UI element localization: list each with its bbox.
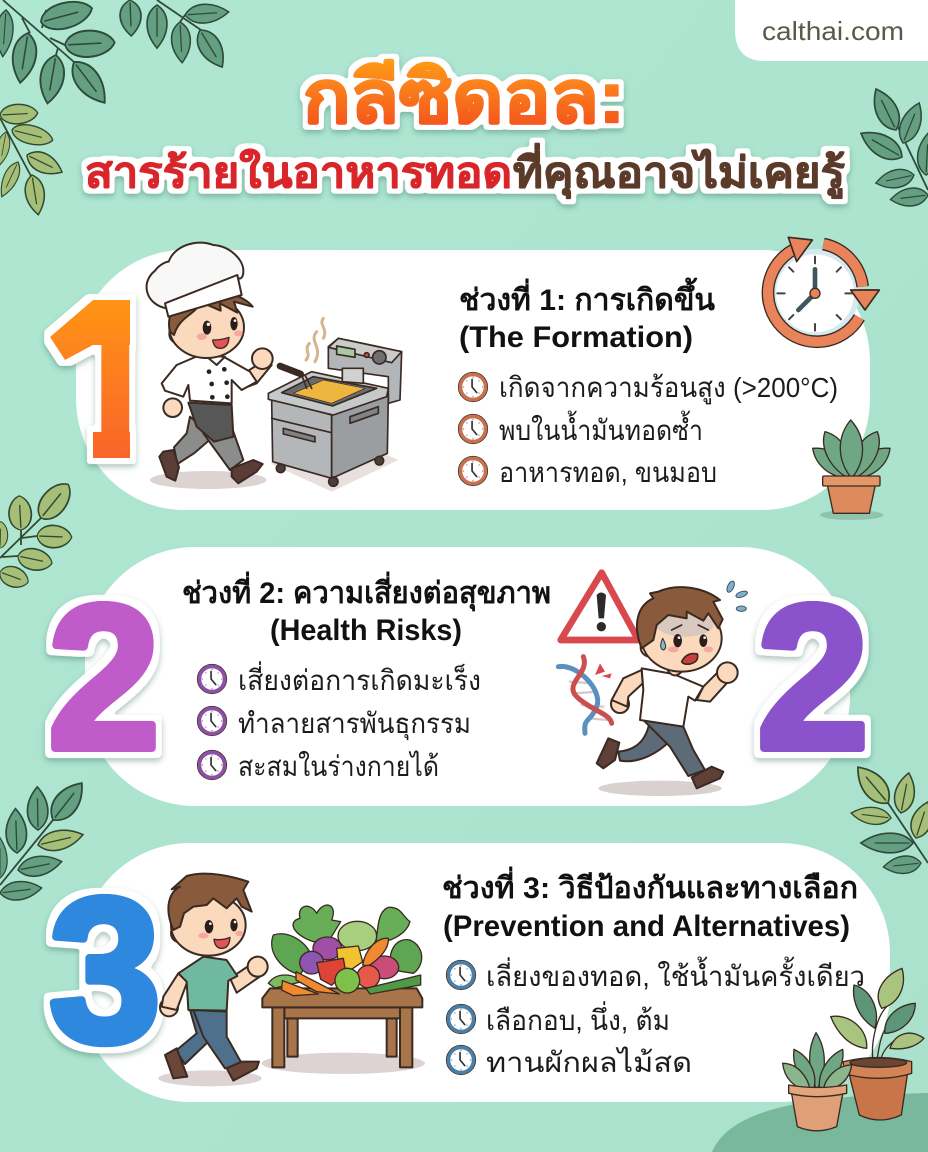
chef jacket — [162, 348, 273, 417]
leaf branch: top centre — [120, 0, 231, 72]
leaf branch: lower left — [0, 776, 91, 902]
hill at bottom right — [712, 1093, 928, 1152]
panel 3: prevention — [80, 843, 890, 1102]
bullets 2: เสี่ยงต่อการเกิดมะเร็ง — [238, 661, 481, 696]
bullets 3: เลี่ยงของทอด, ใช้น้ำมันครั้งเดียว — [486, 956, 865, 992]
bullets 2 — [197, 661, 481, 782]
warning sign — [561, 573, 638, 640]
title — [85, 58, 845, 199]
website tab: calthai.com — [762, 16, 904, 46]
bullets 1: เกิดจากความร้อนสูง (>200°C) — [499, 372, 838, 405]
pants — [174, 417, 243, 470]
heading 2: (Health Risks) — [270, 614, 462, 647]
vegetables — [268, 905, 422, 996]
bullets 2: สะสมในร่างกายได้ — [238, 750, 439, 782]
illustration: chef with fryer — [147, 243, 402, 492]
illustration: happy boy with vegetable table — [158, 874, 425, 1086]
table — [262, 988, 422, 1067]
chef head — [169, 291, 253, 358]
leaf branch: left olive — [0, 103, 66, 216]
heading 1: (The Formation) — [459, 321, 693, 354]
illustration: worried boy, warning sign and DNA — [558, 573, 748, 796]
number 2 right: 2 — [757, 563, 869, 792]
bullets 2: ทำลายสารพันธุกรรม — [238, 708, 471, 741]
title: ที่คุณอาจไม่เคยรู้ — [513, 143, 845, 199]
shoes — [159, 450, 263, 483]
title: กลีซิดอล: — [303, 58, 625, 138]
leaf branch: middle left — [0, 477, 78, 592]
apron — [188, 403, 233, 442]
icon: potted plants bottom right — [783, 968, 924, 1131]
boy legs — [176, 1010, 242, 1068]
heading 1 — [459, 277, 715, 354]
leaf branch: top left — [0, 0, 115, 110]
title: สารร้ายในอาหารทอด — [85, 148, 512, 196]
DNA — [558, 657, 612, 733]
bullets 1: อาหารทอด, ขนมอบ — [499, 457, 717, 488]
boy torso — [160, 957, 268, 1016]
shirt and arms — [611, 662, 738, 727]
bullets 3 — [446, 956, 865, 1078]
chef hat — [147, 243, 243, 317]
icon: clock with arrows — [768, 237, 879, 342]
boy head — [168, 874, 252, 956]
number 3: 3 — [49, 856, 161, 1085]
leaf branch: right top — [856, 84, 928, 208]
legs — [618, 720, 705, 776]
panel 1: the formation — [76, 250, 870, 510]
heading 2 — [182, 571, 551, 647]
head — [637, 587, 723, 675]
heading 1: ช่วงที่ 1: การเกิดขึ้น — [459, 277, 715, 317]
bullets 3: ทานผักผลไม้สด — [486, 1047, 692, 1078]
number 1: 1 — [61, 260, 161, 502]
number 1 — [41, 293, 140, 471]
heading 3: (Prevention and Alternatives) — [443, 910, 850, 943]
icon: potted plant 1 — [813, 420, 890, 520]
website tab — [735, 0, 928, 61]
panel 2: health risks — [85, 547, 850, 806]
sweat drops — [725, 580, 748, 611]
heading 2: ช่วงที่ 2: ความเสี่ยงต่อสุขภาพ — [182, 571, 551, 612]
bullets 1 — [458, 372, 838, 488]
bullets 1: พบในน้ำมันทอดซ้ำ — [499, 410, 703, 446]
number 2 left: 2 — [48, 563, 160, 792]
leaf branch: lower right — [849, 760, 928, 876]
heading 3: ช่วงที่ 3: วิธีป้องกันและทางเลือก — [442, 866, 858, 905]
heading 3 — [442, 866, 858, 943]
fryer — [268, 338, 402, 486]
bullets 3: เลือกอบ, นึ่ง, ต้ม — [486, 1001, 670, 1036]
